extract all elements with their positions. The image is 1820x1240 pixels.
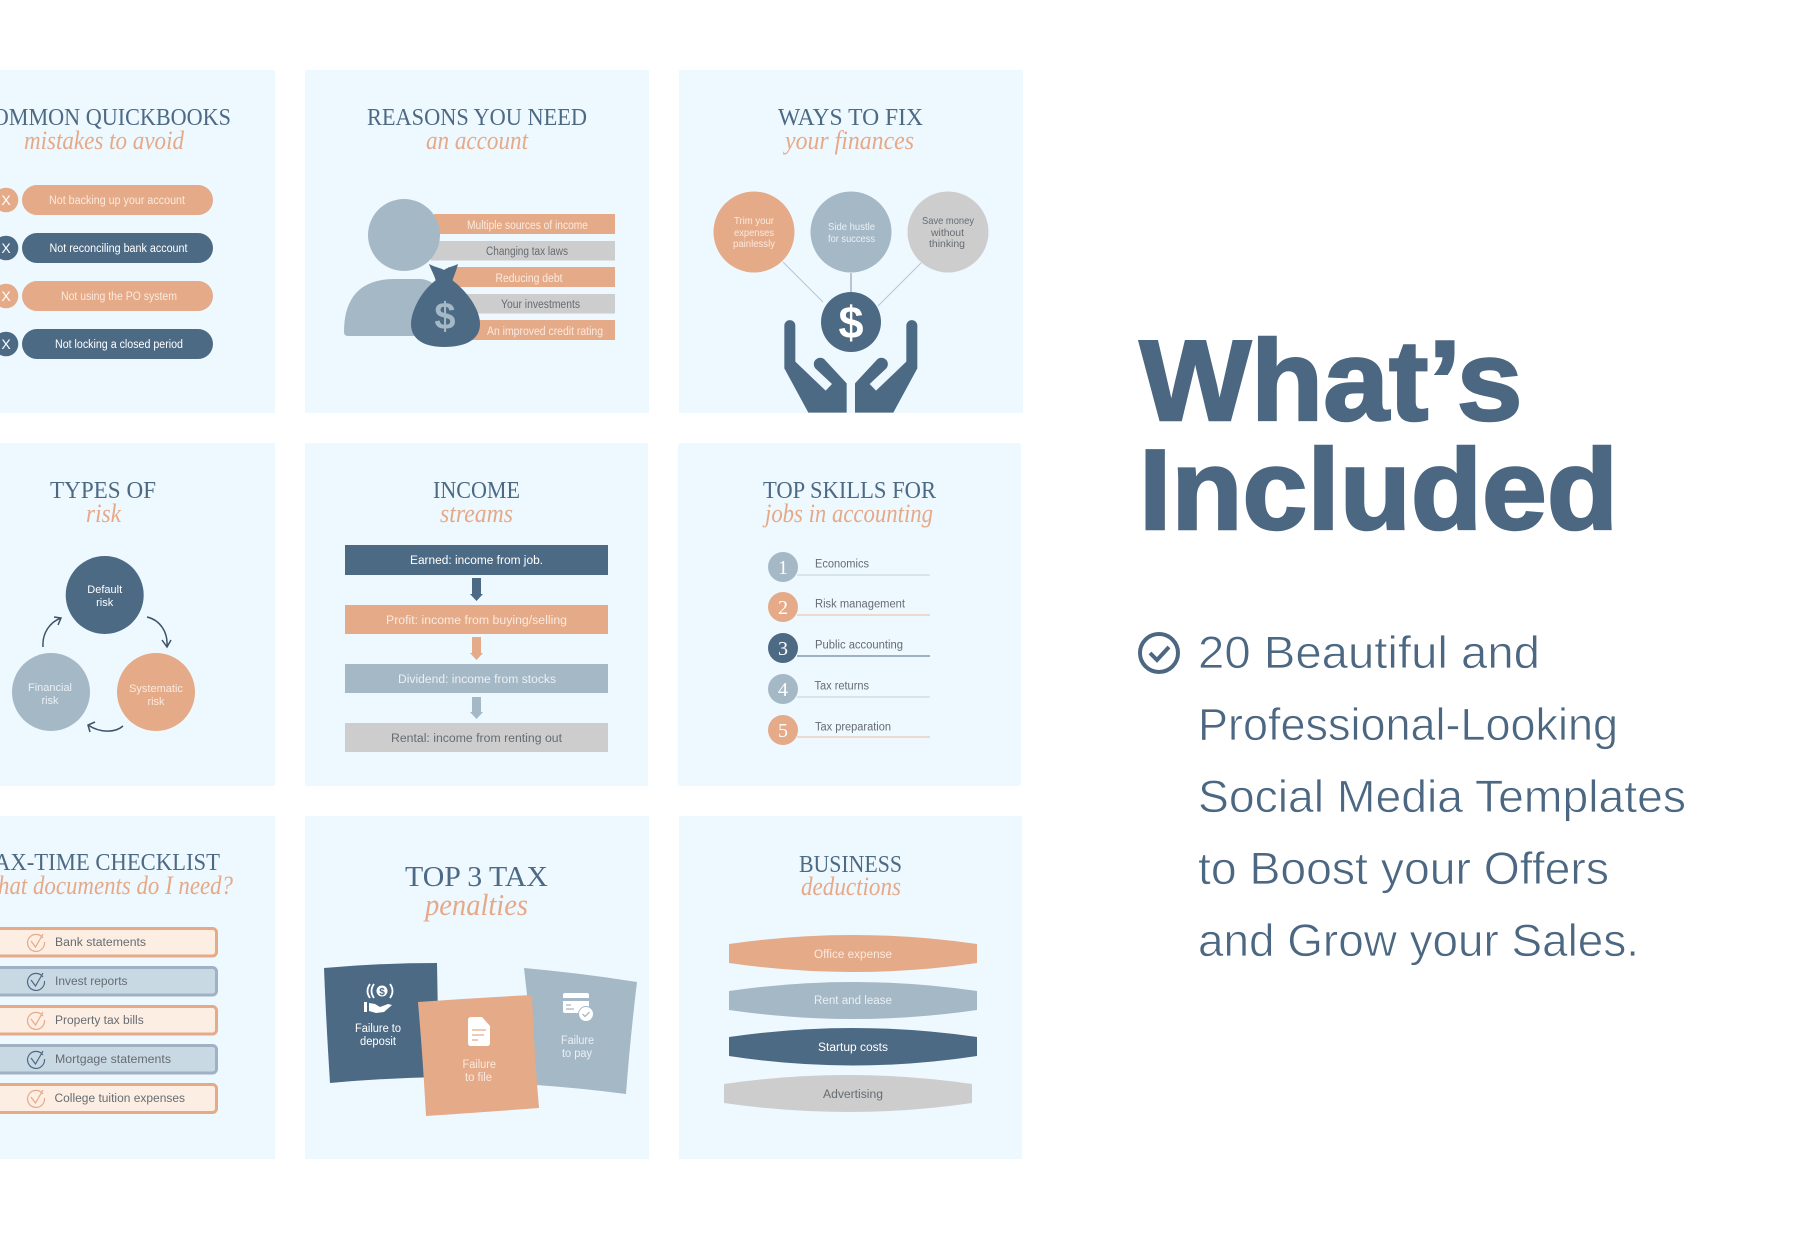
circle: side hustle for success: for success — [828, 233, 875, 245]
heading: income streams: INCOME — [433, 478, 520, 504]
connector lines — [783, 262, 921, 306]
circle: financial risk — [12, 653, 90, 731]
circle: default risk: risk — [96, 597, 114, 609]
heading: income streams: streams — [440, 499, 513, 528]
icon: person silhouette — [344, 199, 446, 336]
check item: college tuition expenses: College tuition expenses — [54, 1093, 185, 1105]
panel: tax-time checklist — [0, 816, 275, 1159]
bar: changing tax laws — [431, 241, 615, 260]
skill 5: tax preparation — [768, 715, 930, 745]
heading: ways to fix your finances: your finances — [782, 126, 914, 155]
heading: top skills — [762, 478, 936, 528]
heading: business deductions: deductions — [801, 872, 901, 901]
text block: description: to Boost your Offers — [1198, 843, 1609, 894]
circle: trim your expenses painlessly — [714, 192, 794, 272]
text block: description: Social Media Templates — [1198, 771, 1686, 822]
band: office expense — [729, 935, 977, 972]
item: not reconciling bank account — [0, 233, 213, 263]
bar: dividend income — [345, 664, 608, 693]
arrow: dividend to rental — [470, 697, 483, 719]
bar: your investments — [460, 294, 615, 314]
circle: side hustle for success — [810, 192, 892, 272]
arrows: risk cycle — [43, 617, 171, 732]
heading: income streams — [433, 478, 520, 528]
bar: reducing debt — [448, 267, 615, 287]
card: failure to deposit — [324, 963, 439, 1083]
band: rent and lease — [729, 982, 977, 1019]
panel: top skills for jobs in accounting — [678, 443, 1021, 786]
heading: top 3 tax penalties: TOP 3 TAX — [405, 861, 548, 893]
icon: dollar coin — [821, 292, 881, 352]
circle: systematic risk: Systematic — [129, 683, 183, 695]
circle: save money without thinking: thinking — [929, 238, 965, 250]
text block: description: and Grow your Sales. — [1198, 915, 1639, 966]
heading: top 3 tax penalties — [405, 861, 548, 922]
circle: systematic risk — [117, 653, 195, 731]
bar: multiple sources of income: Multiple sources of income — [467, 220, 588, 232]
panel: common quickbooks mistakes — [0, 70, 275, 413]
circle: financial risk: risk — [41, 695, 59, 707]
skill 2: risk management: Risk management — [815, 598, 906, 610]
icon: document — [468, 1017, 490, 1046]
arrow: profit to dividend — [470, 637, 483, 660]
band: startup costs: Startup costs — [818, 1042, 888, 1054]
heading: ways to fix your finances: WAYS TO FIX — [778, 105, 923, 131]
card: failure to file: Failure — [462, 1059, 496, 1071]
heading: top skills: TOP SKILLS FOR — [763, 478, 936, 504]
panel: income streams — [305, 443, 648, 786]
heading: ways to fix your finances — [778, 105, 923, 155]
panel: types of risk — [0, 443, 275, 786]
check item: invest reports: Invest reports — [55, 976, 128, 988]
skill 1: economics: Economics — [815, 558, 869, 570]
card: failure to deposit: deposit — [360, 1036, 397, 1048]
check item: property tax bills: Property tax bills — [55, 1015, 144, 1027]
card: failure to deposit: Failure to — [355, 1023, 401, 1035]
title: what's included — [1139, 318, 1618, 554]
check item: mortgage statements: Mortgage statements — [55, 1054, 171, 1066]
skill 3: public accounting: 3 — [778, 638, 788, 660]
heading: common quickbooks mistakes: mistakes to avoid — [24, 126, 185, 155]
skill 2: risk management: 2 — [778, 597, 788, 619]
item: not locking a closed period: Not locking a closed period — [55, 339, 183, 351]
panel: ways to fix your finances — [679, 70, 1023, 413]
heading: types of risk: TYPES OF — [50, 478, 156, 504]
bar: your investments: Your investments — [501, 299, 580, 311]
card: failure to file — [418, 995, 539, 1116]
check item: bank statements — [0, 928, 216, 956]
card: failure to pay: Failure — [561, 1035, 594, 1047]
bar: multiple sources of income — [434, 214, 615, 234]
heading: top skills: jobs in accounting — [762, 499, 933, 528]
skill 1: economics — [768, 552, 930, 582]
panel: business deductions — [679, 816, 1022, 1159]
bar: dividend income: Dividend: income from stocks — [398, 674, 556, 686]
circle: financial risk: Financial — [28, 682, 72, 694]
icon: check circle — [1140, 634, 1178, 672]
arrow: earned to profit — [470, 578, 483, 601]
skill 4: tax returns — [768, 674, 930, 704]
heading: types of risk — [50, 478, 156, 528]
item: not locking a closed period: X — [1, 336, 11, 352]
title: what's included: Included — [1139, 427, 1618, 554]
heading: top 3 tax penalties: penalties — [423, 887, 528, 922]
circle: save money without thinking: Save money — [922, 215, 975, 227]
heading: common quickbooks mistakes — [0, 105, 231, 155]
icon: dollar coin: $ — [838, 297, 864, 348]
skill 4: tax returns: 4 — [778, 679, 788, 701]
item: not reconciling bank account: X — [1, 240, 11, 256]
bar: earned income — [345, 545, 608, 575]
item: not backing up your account: X — [1, 192, 11, 208]
skill 5: tax preparation: Tax preparation — [815, 722, 891, 734]
band: advertising: Advertising — [823, 1089, 883, 1101]
bar: changing tax laws: Changing tax laws — [486, 246, 568, 258]
card: failure to file: to file — [465, 1072, 492, 1084]
item: not backing up your account — [0, 185, 213, 215]
circle: default risk — [66, 556, 144, 634]
bar: profit income — [345, 605, 608, 634]
skill 3: public accounting: Public accounting — [815, 640, 903, 652]
band: office expense: Office expense — [814, 949, 892, 961]
circle: save money without thinking: without — [930, 227, 964, 239]
card: failure to pay: to pay — [562, 1048, 592, 1060]
title: what's included: What’s — [1140, 318, 1522, 445]
circle: trim your expenses painlessly: Trim your — [734, 215, 774, 227]
bar: an improved credit rating — [465, 320, 615, 340]
card: failure to pay — [524, 968, 637, 1094]
text block: description: Professional-Looking — [1198, 699, 1618, 750]
skill 5: tax preparation: 5 — [778, 720, 788, 742]
circle: side hustle for success: Side hustle — [828, 221, 875, 233]
heading: reasons you need an account — [367, 105, 587, 155]
text block: description — [1198, 627, 1686, 966]
item: not reconciling bank account: Not reconciling bank account — [50, 243, 188, 255]
icon: money bag: $ — [434, 296, 456, 338]
bar: rental income — [345, 723, 608, 752]
heading: types of risk: risk — [86, 499, 121, 528]
heading: reasons you need an account: REASONS YOU NEED — [367, 105, 587, 131]
heading: tax-time checklist — [0, 850, 233, 900]
band: startup costs — [729, 1028, 977, 1066]
bar: rental income: Rental: income from renting out — [391, 733, 563, 745]
circle: systematic risk: risk — [147, 696, 165, 708]
heading: business deductions — [799, 852, 902, 901]
icon: card and check — [563, 993, 594, 1022]
panel: reasons you need an account — [305, 70, 649, 413]
circle: save money without thinking — [908, 192, 988, 272]
circle: trim your expenses painlessly: painlessly — [733, 238, 776, 250]
bar: reducing debt: Reducing debt — [496, 273, 563, 285]
skill 3: public accounting — [768, 633, 930, 663]
item: not using the po system: X — [1, 288, 11, 304]
item: not backing up your account: Not backing up your account — [49, 195, 186, 207]
skill 2: risk management — [768, 592, 930, 622]
check item: mortgage statements — [0, 1046, 216, 1073]
band: advertising — [724, 1075, 972, 1112]
check item: invest reports — [0, 968, 216, 995]
check item: college tuition expenses — [0, 1084, 216, 1112]
heading: reasons you need an account: an account — [426, 126, 529, 155]
bar: profit income: Profit: income from buying/selling — [386, 615, 567, 627]
skill 4: tax returns: Tax returns — [814, 680, 869, 692]
item: not using the po system — [0, 281, 213, 311]
item: not using the po system: Not using the PO system — [61, 291, 177, 303]
text block: description: 20 Beautiful and — [1198, 627, 1540, 678]
heading: business deductions: BUSINESS — [799, 852, 902, 878]
skill 1: economics: 1 — [778, 557, 788, 579]
bar: an improved credit rating: An improved credit rating — [487, 326, 603, 338]
check item: property tax bills — [0, 1006, 216, 1034]
item: not locking a closed period — [0, 329, 213, 359]
check item: bank statements: Bank statements — [55, 937, 146, 949]
band: rent and lease: Rent and lease — [814, 995, 892, 1007]
bar: earned income: Earned: income from job. — [410, 555, 543, 567]
panel: top 3 tax penalties — [305, 816, 649, 1159]
circle: default risk: Default — [87, 584, 122, 596]
circle: trim your expenses painlessly: expenses — [734, 227, 774, 239]
icon: coin and hand: $ — [379, 987, 385, 998]
icon: money bag — [411, 264, 480, 347]
icon: open hands — [784, 320, 917, 413]
